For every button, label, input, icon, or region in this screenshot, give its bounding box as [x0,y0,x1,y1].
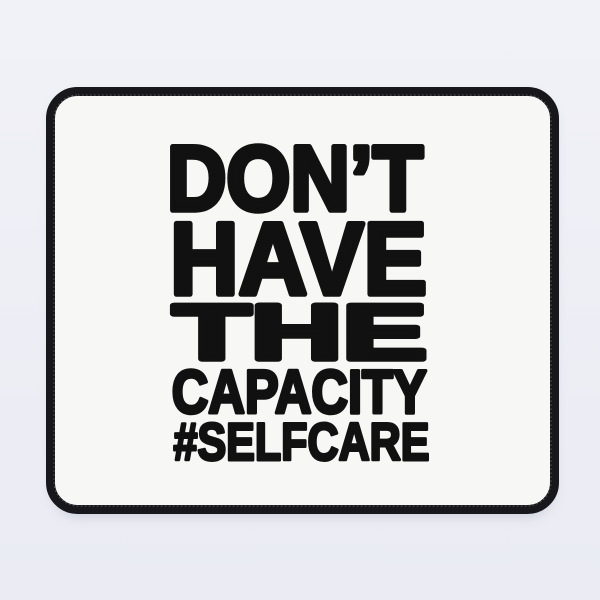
slogan text [167,128,430,472]
line: THE: THE [173,290,427,376]
line: DON'T: DON’T [167,128,423,230]
mouse mat [50,92,556,518]
mat border [50,92,554,510]
line: #SELFCARE: #SELFCARE [174,413,430,472]
line: CAPACITY: CAPACITY [172,358,427,426]
line: HAVE: HAVE [170,201,427,316]
